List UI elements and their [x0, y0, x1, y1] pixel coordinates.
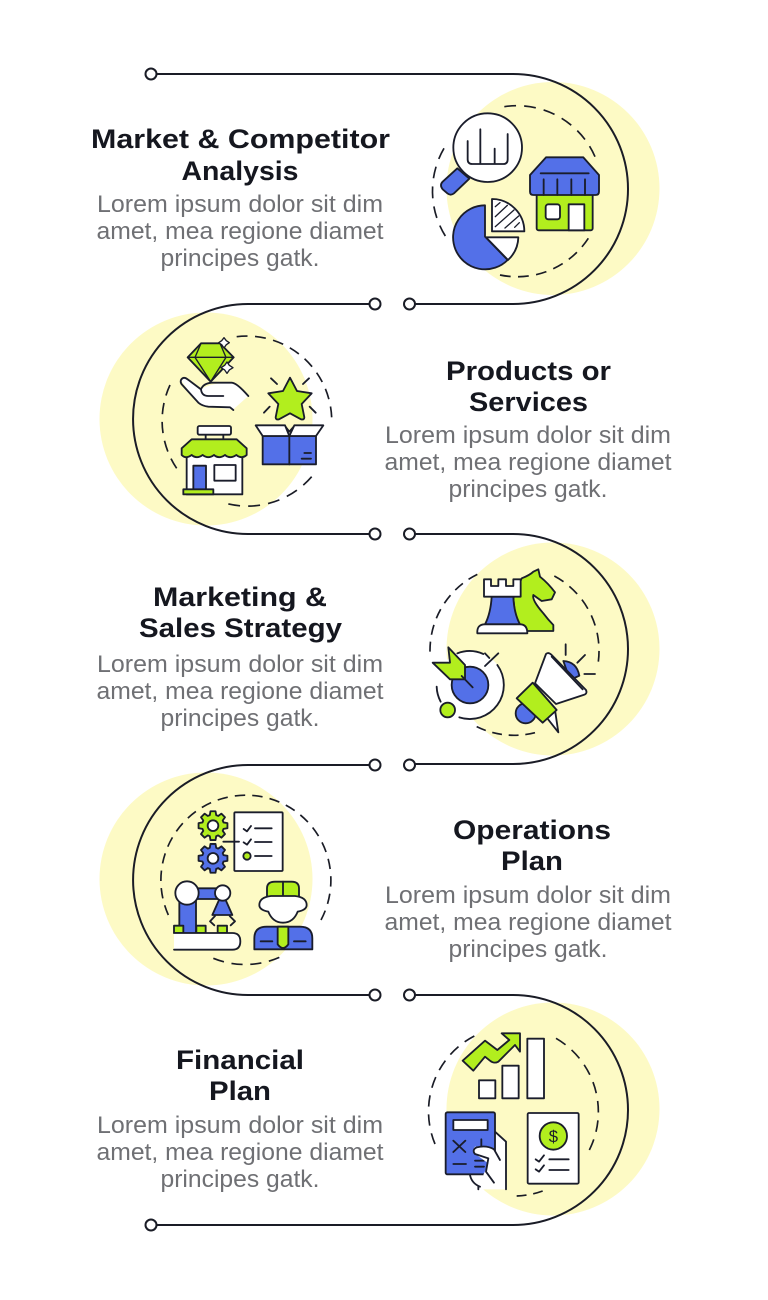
text block 1: Lorem ipsum dolor sit dim — [97, 191, 383, 218]
heading: operations plan: Operations — [453, 815, 611, 845]
yellow circle 3 — [446, 542, 660, 756]
heading: operations plan: Plan — [501, 846, 563, 876]
heading: marketing and sales strategy: Sales Strategy — [139, 613, 342, 643]
icon: financial document — [528, 1113, 579, 1184]
icon: worker — [254, 882, 312, 949]
icon: growth arrow and bars — [463, 1033, 544, 1098]
icon: diamond in hand — [181, 338, 248, 410]
dashed ring 4 — [161, 795, 331, 965]
connector line 3 — [415, 534, 628, 764]
icon: storefront — [182, 426, 247, 494]
heading: market and competitor analysis — [91, 124, 391, 186]
heading: financial plan: Plan — [209, 1076, 271, 1106]
icon group: products — [162, 336, 332, 506]
icon: chess pieces — [477, 569, 555, 633]
icon: star in box — [256, 378, 323, 464]
text block 1 — [96, 191, 384, 272]
step 3: marketing and sales strategy — [96, 534, 660, 764]
icon: target with arrow — [433, 647, 504, 719]
timeline nodes — [146, 68, 415, 1230]
icon: calculator in hand — [446, 1112, 506, 1189]
text block 4: Lorem ipsum dolor sit dim — [385, 882, 671, 909]
step 4: operations plan — [100, 765, 672, 995]
heading: marketing and sales strategy — [139, 582, 342, 643]
heading: market and competitor analysis: Market & Competitor — [91, 124, 391, 154]
heading: marketing and sales strategy: Marketing & — [153, 582, 327, 612]
heading: products or services: Products or — [446, 356, 612, 386]
icon group: finance — [429, 1033, 598, 1196]
icon: robot arm on conveyor — [174, 881, 240, 950]
heading: products or services — [446, 356, 612, 417]
dashed ring 3 — [430, 574, 599, 735]
text block 1: principes gatk. — [160, 245, 320, 272]
connector line 5 — [156, 995, 628, 1225]
connector line 4 — [133, 765, 369, 995]
text block 4: amet, mea regione diamet — [384, 909, 672, 936]
text block 2 — [384, 422, 672, 503]
text block 2: principes gatk. — [448, 476, 608, 503]
text block 4 — [384, 882, 672, 963]
text block 3: amet, mea regione diamet — [96, 678, 384, 705]
step 5: financial plan — [96, 995, 660, 1225]
step 2: products or services — [100, 304, 672, 534]
icon: financial document: $ — [549, 1127, 558, 1146]
icon: megaphone — [516, 644, 595, 732]
icon: pie chart — [453, 199, 524, 269]
icon group: operations — [161, 795, 331, 965]
yellow circle 4 — [100, 772, 312, 986]
icon: gears — [199, 811, 227, 873]
yellow circle 5 — [446, 1002, 660, 1216]
text block 2: amet, mea regione diamet — [384, 449, 672, 476]
icon group: strategy — [430, 569, 599, 735]
text block 3: principes gatk. — [160, 705, 320, 732]
text block 5: principes gatk. — [160, 1166, 320, 1193]
heading: products or services: Services — [469, 387, 588, 417]
text block 3: Lorem ipsum dolor sit dim — [97, 651, 383, 678]
text block 4: principes gatk. — [448, 936, 608, 963]
heading: financial plan: Financial — [176, 1045, 304, 1075]
icon group: analysis — [432, 106, 599, 277]
heading: market and competitor analysis: Analysis — [182, 156, 298, 186]
yellow circle 2 — [100, 312, 312, 526]
icon: checklist — [223, 812, 283, 871]
text block 5 — [96, 1112, 384, 1193]
icon: magnifying glass — [441, 113, 522, 195]
dashed ring 5 — [429, 1036, 598, 1196]
dashed ring 2 — [162, 336, 332, 506]
yellow circle 1 — [446, 82, 660, 295]
icon: shop — [530, 157, 599, 230]
dashed ring 1 — [432, 106, 595, 277]
text block 2: Lorem ipsum dolor sit dim — [385, 422, 671, 449]
text block 5: Lorem ipsum dolor sit dim — [97, 1112, 383, 1139]
text block 1: amet, mea regione diamet — [96, 218, 384, 245]
heading: financial plan — [176, 1045, 304, 1106]
text block 5: amet, mea regione diamet — [96, 1139, 384, 1166]
step 1: market and competitor analysis — [91, 74, 660, 304]
text block 3 — [96, 651, 384, 732]
connector line 1 — [156, 74, 628, 304]
heading: operations plan — [453, 815, 611, 876]
connector line 2 — [133, 304, 369, 534]
